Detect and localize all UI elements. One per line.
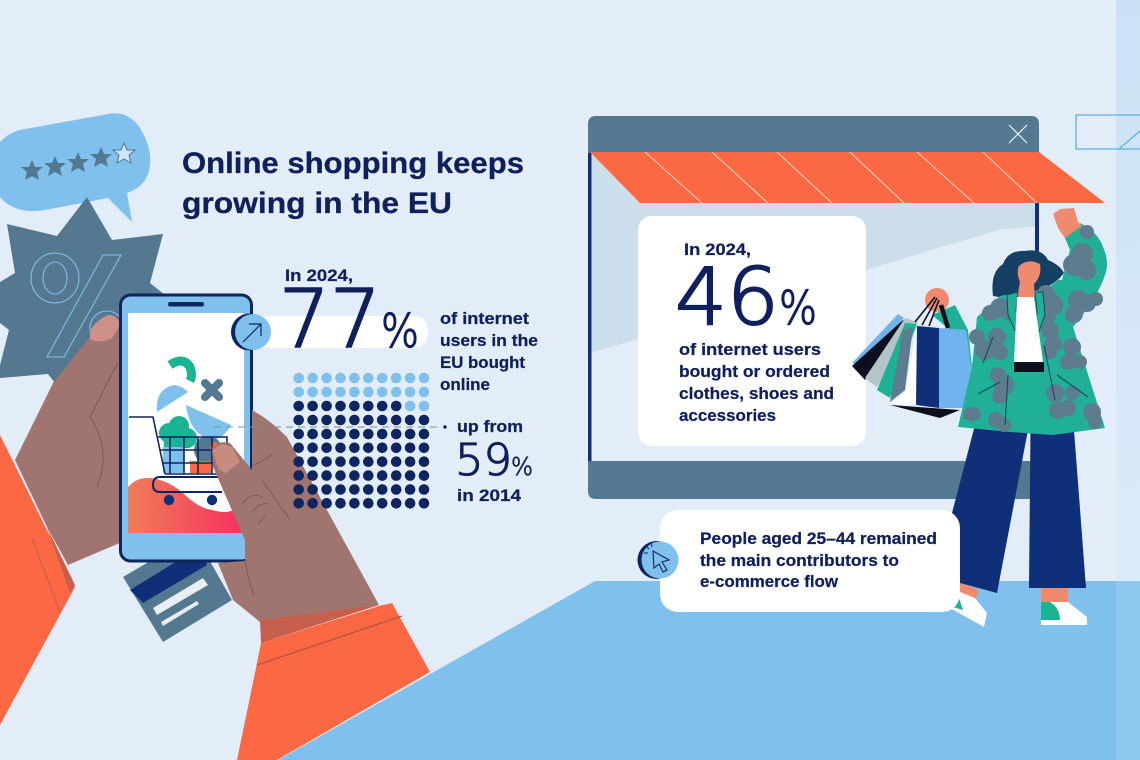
callout: main contributors: e-commerce flow	[700, 573, 838, 591]
awning	[590, 152, 1105, 203]
floor under strip	[1116, 581, 1140, 760]
decorative window outline	[1076, 115, 1140, 149]
stat: 59 percent: in 2014	[457, 487, 522, 505]
shopping cart contents	[157, 361, 231, 473]
raised fist	[1053, 208, 1082, 238]
stat: 77 percent: online	[440, 376, 490, 394]
callout: main contributors	[638, 510, 960, 612]
phone	[120, 295, 252, 561]
cart wheels	[164, 495, 217, 505]
dot chart: 100 dots	[293, 373, 429, 509]
panel: clothes stat card: In 2024,	[684, 241, 751, 259]
trousers	[952, 372, 1086, 593]
coat lapels	[1007, 292, 1045, 345]
bag handles	[915, 297, 939, 326]
title: growing in the EU	[182, 187, 452, 220]
awning post	[1035, 203, 1039, 255]
title	[182, 147, 524, 220]
icon: click cursor	[638, 541, 678, 579]
panel: clothes stat card: clothes, shoes and	[679, 385, 834, 403]
panel: clothes stat card: bought or ordered	[679, 363, 830, 381]
stat: 77 percent: In 2024,	[285, 267, 353, 285]
stat: 77 percent: users in the	[440, 332, 538, 350]
right sleeve	[237, 603, 430, 760]
icon: percent starburst badge	[0, 197, 165, 400]
dashed leader line	[214, 425, 447, 429]
phone speaker	[168, 302, 204, 306]
face and neck	[1017, 261, 1040, 298]
right hand	[212, 410, 379, 622]
icon: arrow circle	[231, 314, 271, 350]
left hand	[15, 315, 122, 565]
panel: clothes stat card: 46	[675, 253, 779, 343]
stat: 77 percent	[231, 267, 538, 394]
window left frame	[588, 152, 592, 464]
icon: speech bubble with star rating	[0, 113, 150, 222]
floor	[278, 581, 1116, 760]
title: Online shopping keeps	[182, 147, 524, 180]
left arm	[932, 305, 972, 372]
panel: clothes stat card: %	[779, 281, 817, 335]
stat: 59 percent	[455, 418, 533, 505]
icon: credit card	[123, 535, 232, 642]
callout: main contributors: the main contributors to	[700, 552, 899, 570]
shoes	[950, 583, 1087, 627]
hair	[992, 250, 1064, 298]
back bags	[852, 314, 918, 402]
icon: close cross	[1009, 125, 1027, 143]
front bag	[890, 326, 977, 418]
callout: main contributors: People aged 25–44 remained	[700, 530, 937, 548]
screen wave	[128, 478, 244, 533]
window top bar	[588, 116, 1039, 153]
stat: 77 percent: 77	[279, 273, 381, 366]
hand holding bags	[925, 288, 949, 312]
panel: clothes stat card	[638, 216, 866, 446]
white pill	[250, 316, 428, 348]
stat: 59 percent: 59	[455, 435, 512, 486]
panel: clothes stat card: accessories	[679, 407, 776, 425]
woman with shopping bags	[852, 208, 1107, 627]
window bottom bar	[588, 461, 1040, 499]
phone screen	[128, 313, 244, 533]
stat: 77 percent: EU bought	[440, 354, 526, 372]
stat: 59 percent: %	[511, 452, 533, 481]
panel: clothes stat card: of internet users	[679, 341, 821, 359]
panel: shop window	[588, 116, 1105, 499]
stat: 77 percent: %	[381, 304, 419, 358]
window shade	[591, 152, 1037, 353]
shirt	[1014, 297, 1043, 362]
stat: 59 percent: up from	[457, 418, 523, 436]
shopping cart	[129, 417, 227, 492]
left sleeve	[0, 435, 75, 725]
right side strip	[1116, 0, 1140, 581]
stat: 77 percent: of internet	[440, 310, 530, 328]
belt	[1014, 362, 1044, 372]
coat	[958, 223, 1107, 435]
